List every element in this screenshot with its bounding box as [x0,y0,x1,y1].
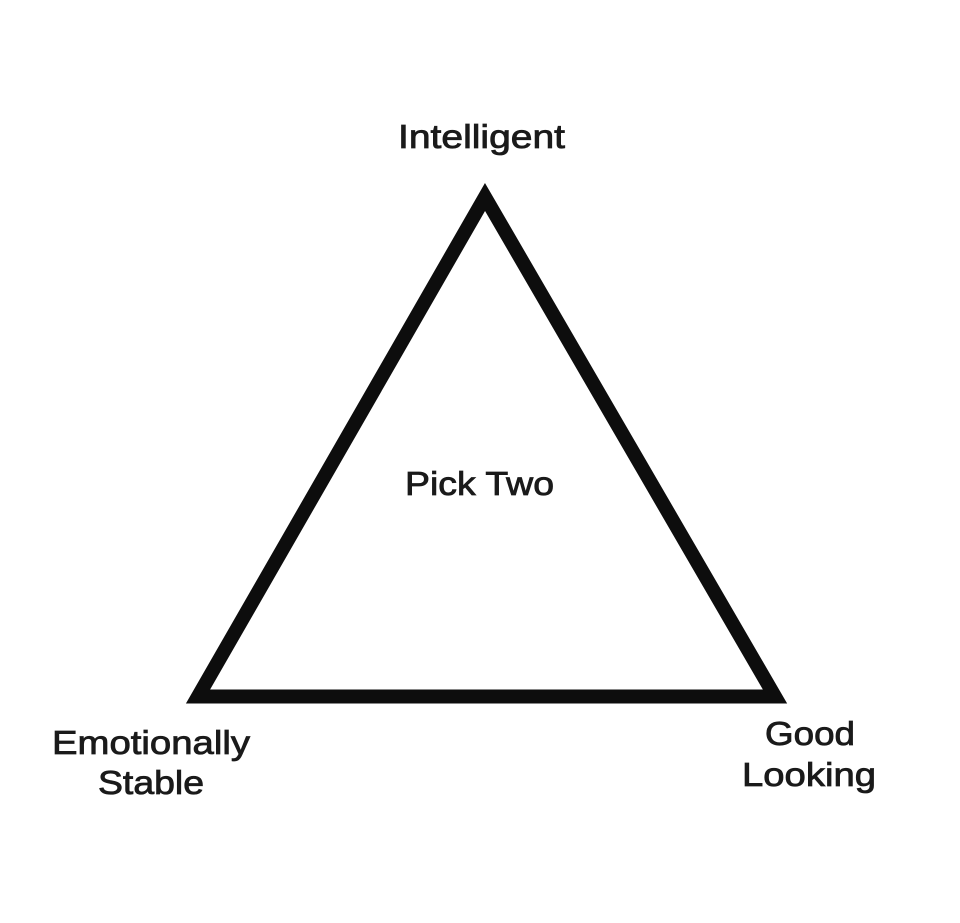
label: Good Looking [742,715,876,793]
triangle [198,197,775,696]
label: Pick Two: Pick Two [405,465,554,502]
label: Emotionally Stable: Emotionally [52,724,251,761]
label: Emotionally Stable [52,724,251,801]
label: Emotionally Stable: Stable [98,764,204,801]
label: Good Looking: Good [765,715,855,752]
label: Good Looking: Looking [742,756,876,793]
label: Intelligent: Intelligent [398,118,565,155]
